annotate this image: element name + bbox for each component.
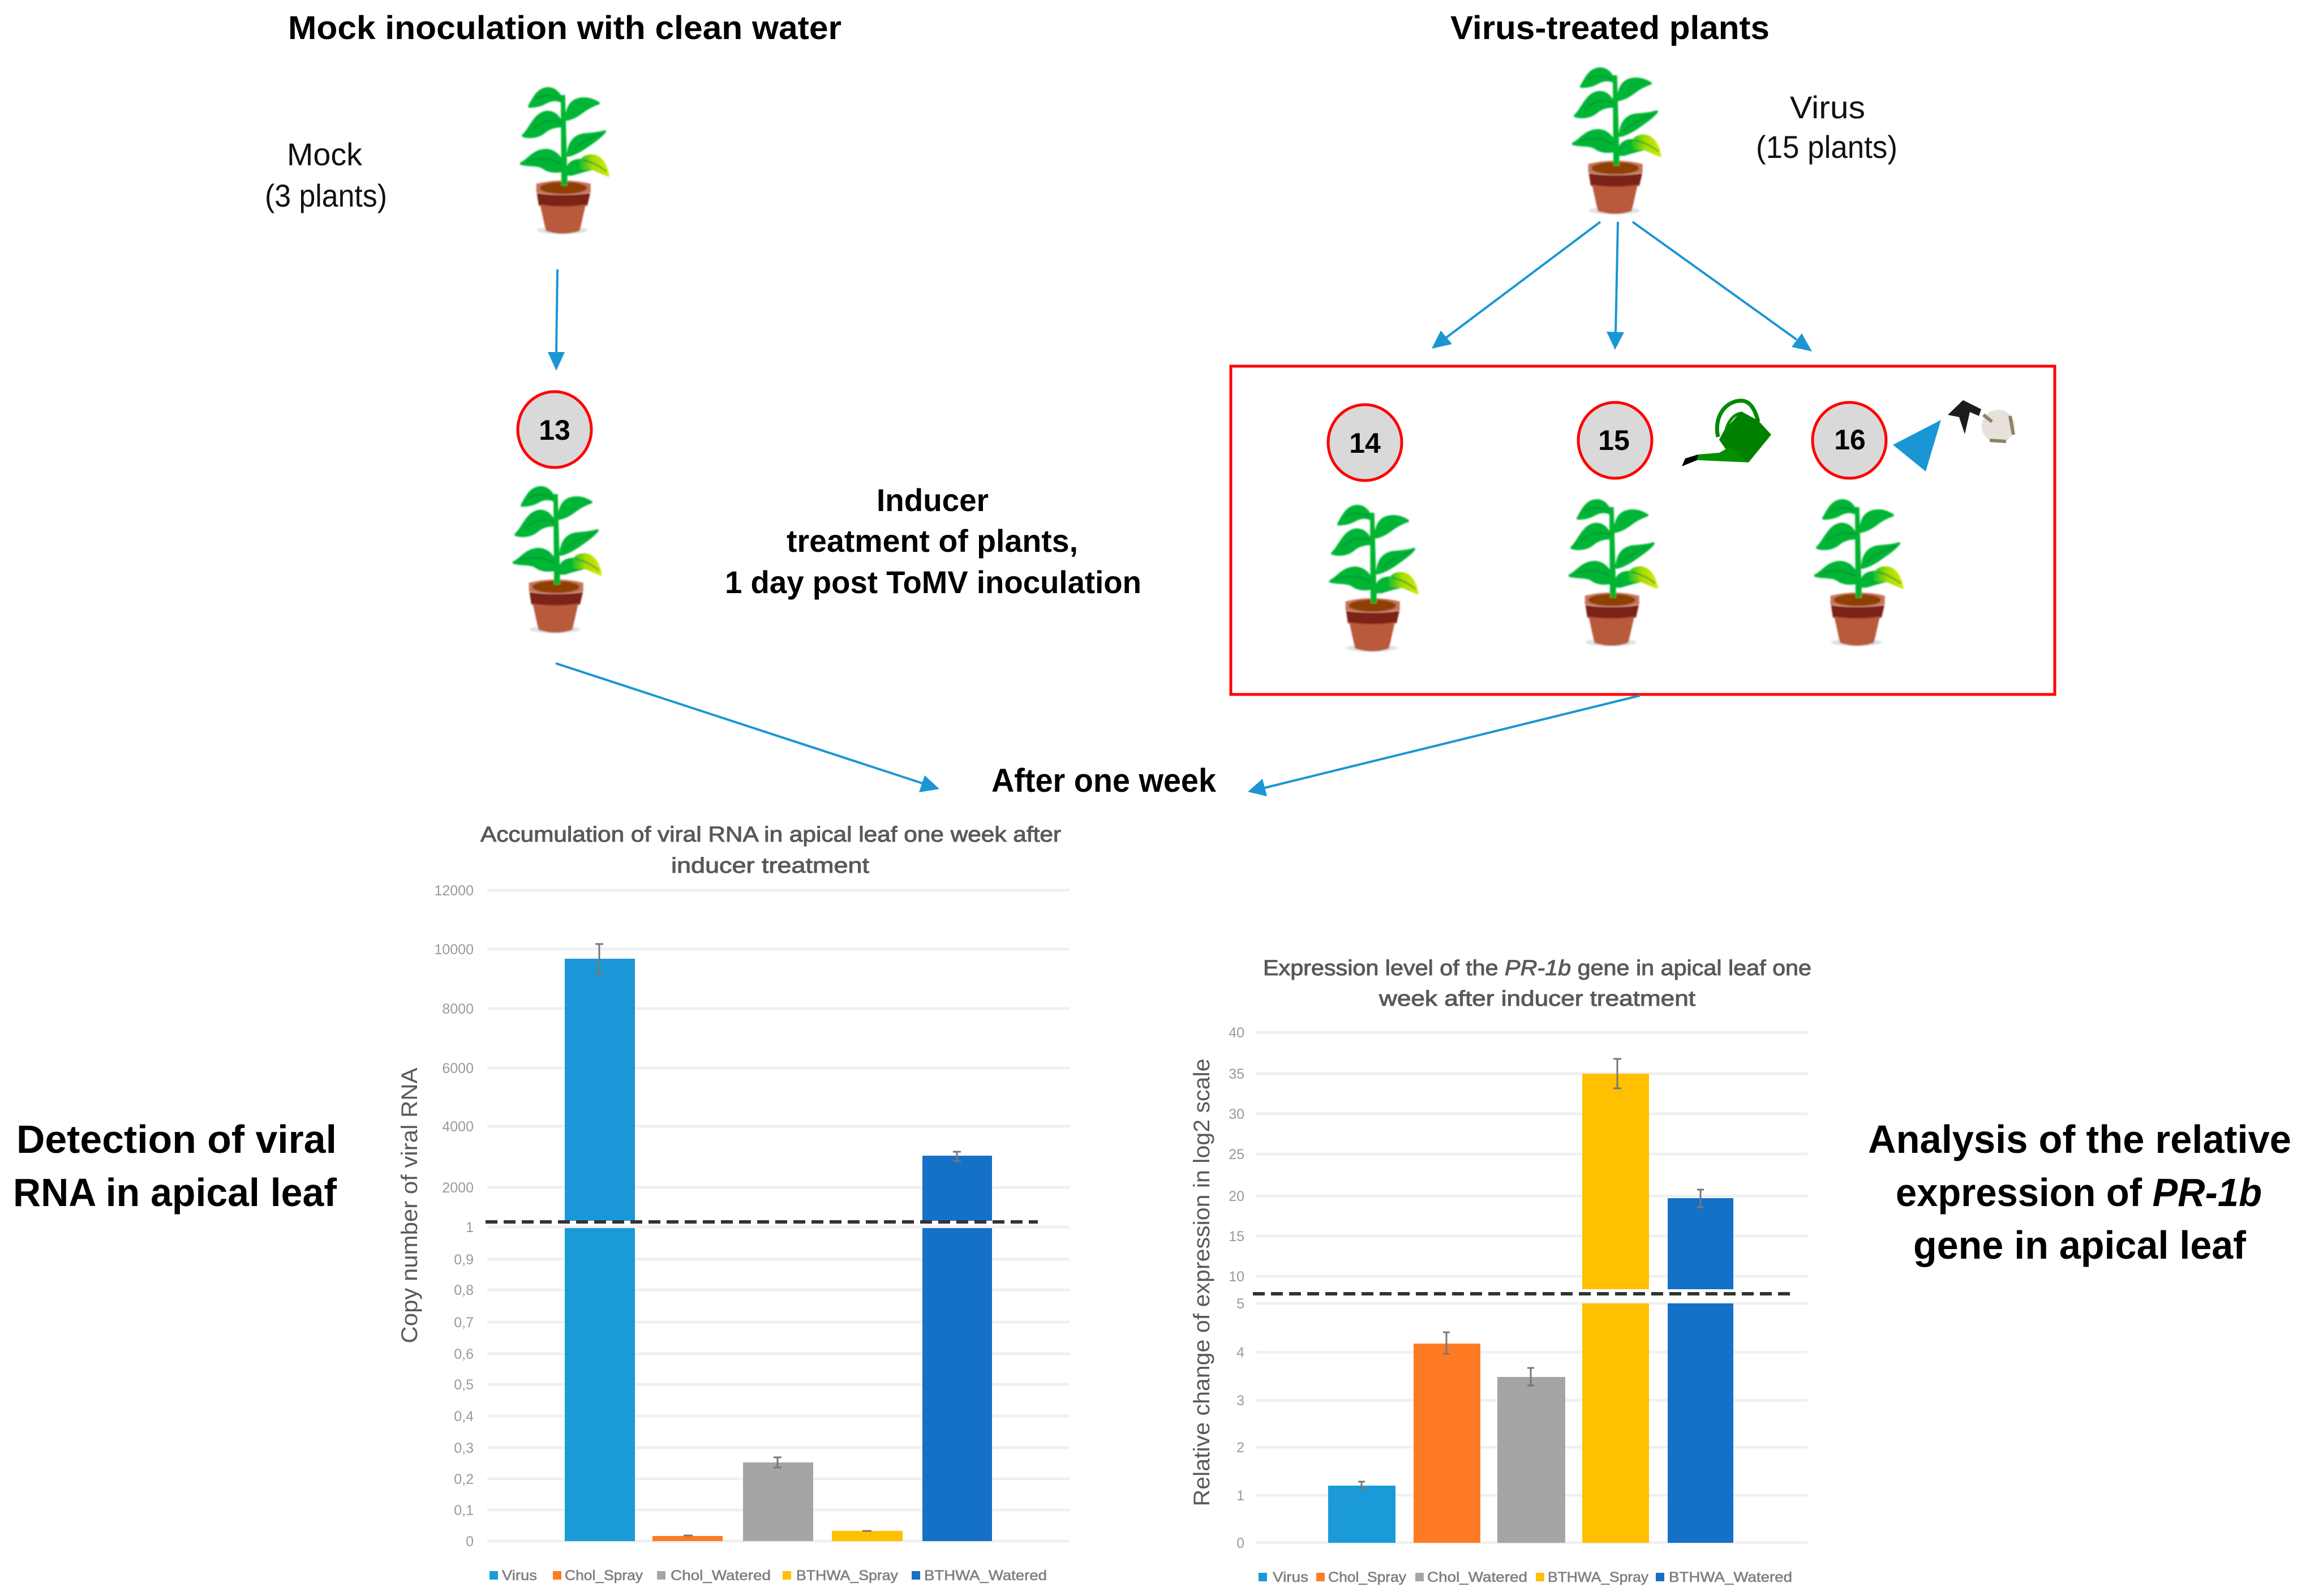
- legend: Chol_Spray: [565, 1568, 643, 1584]
- y axis ticks: 0,5: [454, 1377, 474, 1393]
- y axis ticks: 0,9: [454, 1252, 474, 1268]
- y axis ticks: 20: [1229, 1189, 1244, 1204]
- panel: red treatment box: [1231, 366, 2055, 694]
- icon: virus plant: [1573, 68, 1661, 214]
- bar: chol watered: [1497, 1368, 1565, 1543]
- badge: 14: 14: [1349, 427, 1381, 459]
- badge: 15: [1578, 402, 1652, 478]
- chart title: [1263, 956, 1811, 1011]
- bar: BTHWA watered: [1668, 1190, 1733, 1543]
- text: inducer treatment: [725, 482, 1141, 600]
- bar: BTHWA watered: [922, 1152, 992, 1541]
- y axis ticks: 6000: [442, 1061, 474, 1076]
- y axis ticks: [434, 883, 474, 1550]
- y axis ticks: 2000: [442, 1180, 474, 1196]
- y axis ticks: 40: [1229, 1025, 1244, 1041]
- arrow: mock to group 13: [548, 269, 565, 371]
- y axis ticks: 35: [1229, 1066, 1244, 1082]
- legend: Chol_Spray: [1328, 1569, 1407, 1585]
- icon: plant group 15: [1570, 500, 1658, 646]
- y axis ticks: 0: [1236, 1535, 1244, 1551]
- badge: 13: 13: [539, 414, 570, 446]
- arrow: group 13 to after one week: [556, 663, 939, 792]
- y axis title: Copy number of viral RNA: [397, 1067, 422, 1344]
- badge: 16: 16: [1834, 424, 1866, 456]
- label: virus 15 plants: Virus: [1790, 89, 1865, 125]
- legend: Chol_Watered: [1427, 1569, 1527, 1585]
- y axis ticks: 0,7: [454, 1315, 474, 1331]
- y axis ticks: 15: [1229, 1229, 1244, 1245]
- text: inducer treatment: treatment of plants,: [787, 523, 1078, 559]
- legend: [489, 1568, 1047, 1584]
- text: analysis of relative expression: [1868, 1117, 2291, 1267]
- chart title: [480, 823, 1061, 878]
- badge: 15: 15: [1598, 424, 1630, 456]
- label: mock 3 plants: [265, 136, 387, 213]
- text: analysis of relative expression: Analysis of the relative: [1868, 1117, 2291, 1161]
- label: mock 3 plants: Mock: [287, 136, 363, 172]
- y axis ticks: 0,2: [454, 1471, 474, 1487]
- y axis ticks: 0: [466, 1534, 474, 1550]
- legend: Virus: [502, 1568, 537, 1584]
- y axis ticks: 4000: [442, 1119, 474, 1135]
- legend: BTHWA_Watered: [1669, 1569, 1792, 1585]
- chart: PR-1b expression: [1189, 956, 1811, 1585]
- y axis ticks: 10: [1229, 1269, 1244, 1285]
- label: virus 15 plants: (15 plants): [1756, 129, 1897, 165]
- chart: viral RNA accumulation: [397, 823, 1070, 1584]
- y axis ticks: 4: [1236, 1345, 1244, 1361]
- text: analysis of relative expression: expression of PR-1b: [1896, 1170, 2262, 1215]
- legend: Chol_Watered: [671, 1568, 771, 1584]
- icon: watering can: [1682, 401, 1771, 466]
- y axis ticks: 30: [1229, 1106, 1244, 1122]
- y axis ticks: 1: [466, 1220, 474, 1235]
- text: inducer treatment: Inducer: [877, 482, 989, 518]
- legend: Virus: [1273, 1569, 1308, 1585]
- bar: chol spray: [652, 1535, 723, 1541]
- heading: after one week: After one week: [991, 762, 1217, 799]
- badge: 16: [1813, 402, 1886, 478]
- y axis ticks: 3: [1236, 1393, 1244, 1409]
- badge: 14: [1328, 405, 1402, 480]
- arrow: treated box to after one week: [1248, 696, 1640, 796]
- text: inducer treatment: 1 day post ToMV inoculation: [725, 564, 1141, 600]
- icon: blue spray triangle: [1893, 420, 1941, 471]
- legend: BTHWA_Spray: [1548, 1569, 1649, 1585]
- text: detection of viral RNA: [13, 1117, 337, 1215]
- y axis ticks: 0,4: [454, 1409, 474, 1425]
- y axis ticks: [1229, 1025, 1244, 1551]
- label: virus 15 plants: [1756, 89, 1897, 165]
- y axis ticks: 0,6: [454, 1346, 474, 1362]
- y axis ticks: 2: [1236, 1440, 1244, 1456]
- y axis ticks: 0,8: [454, 1282, 474, 1298]
- bar: BTHWA spray: [1582, 1059, 1649, 1543]
- heading: virus-treated plants: Virus-treated plants: [1450, 10, 1770, 46]
- icon: spray bottle: [1948, 400, 2015, 443]
- y axis title: Relative change of expression in log2 scale: [1189, 1058, 1214, 1507]
- icon: mock plant: [521, 88, 609, 234]
- legend: [1259, 1569, 1792, 1585]
- icon: plant group 13: [514, 487, 602, 633]
- icon: plant group 14: [1330, 506, 1419, 652]
- arrow: virus to group 15: [1607, 222, 1624, 350]
- y axis ticks: 0,3: [454, 1440, 474, 1456]
- bar: chol spray: [1414, 1332, 1480, 1543]
- arrow: virus to group 14: [1432, 222, 1600, 349]
- text: detection of viral RNA: RNA in apical leaf: [13, 1170, 337, 1215]
- text: analysis of relative expression: gene in apical leaf: [1913, 1223, 2247, 1267]
- y axis ticks: 8000: [442, 1001, 474, 1017]
- bar: virus: [1328, 1482, 1395, 1543]
- axis break dashed line: [486, 1220, 1038, 1224]
- text: detection of viral RNA: Detection of viral: [16, 1117, 337, 1161]
- icon: plant group 16: [1815, 500, 1904, 646]
- y axis ticks: 12000: [434, 883, 474, 899]
- badge: 13: [518, 392, 591, 467]
- axis break dashed line: [1253, 1292, 1795, 1295]
- heading: mock inoculation: Mock inoculation with clean water: [288, 10, 841, 46]
- arrow: virus to group 16: [1633, 222, 1812, 351]
- legend: BTHWA_Spray: [796, 1568, 899, 1584]
- y axis ticks: 10000: [434, 942, 474, 958]
- chart title: inducer treatment: [671, 854, 870, 878]
- chart title: Expression level of the PR-1b gene in apical leaf one: [1263, 956, 1811, 980]
- legend: BTHWA_Watered: [924, 1568, 1047, 1584]
- y axis ticks: 25: [1229, 1147, 1244, 1162]
- y axis ticks: 1: [1236, 1488, 1244, 1504]
- bar: BTHWA spray: [832, 1531, 903, 1541]
- y axis ticks: 0,1: [454, 1503, 474, 1518]
- y axis ticks: 5: [1236, 1296, 1244, 1312]
- label: mock 3 plants: (3 plants): [265, 178, 387, 213]
- bar: chol watered: [743, 1457, 813, 1541]
- chart title: week after inducer treatment: [1379, 987, 1696, 1011]
- bar: virus: [565, 944, 635, 1541]
- chart title: Accumulation of viral RNA in apical leaf one week after: [480, 823, 1061, 847]
